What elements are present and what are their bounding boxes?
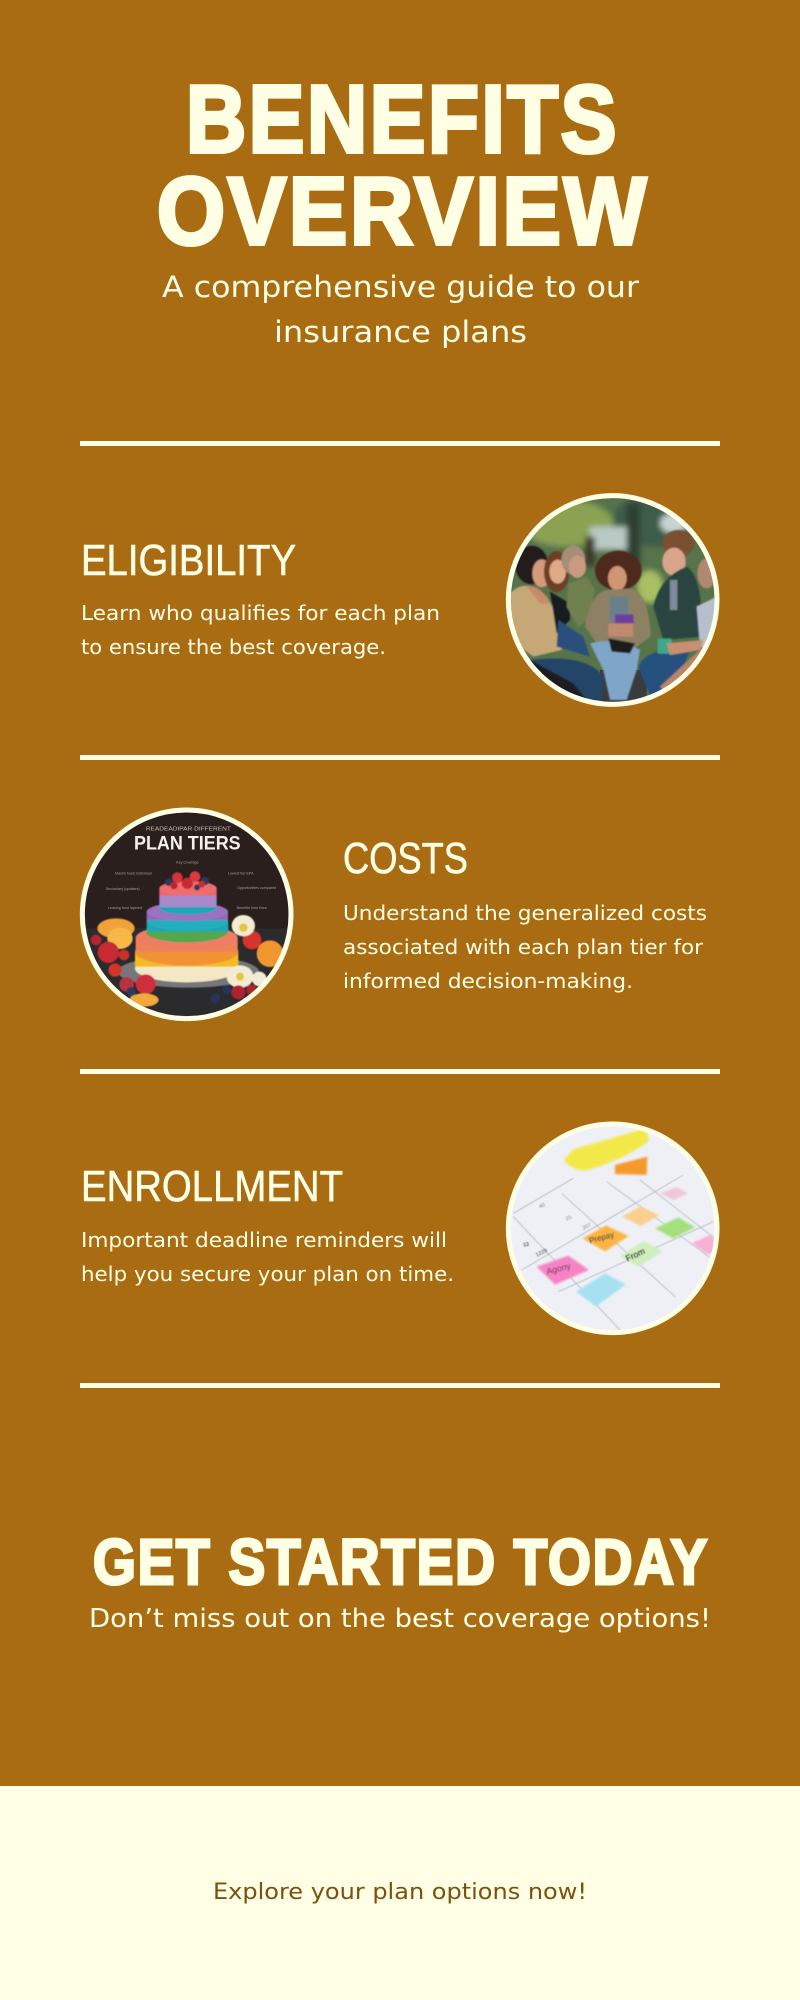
photo: calendar with sticky notes [507,1122,720,1335]
cake image caption: Key coverage [176,861,199,865]
footer band [0,1786,800,2000]
call to action [89,1526,711,1634]
cake image caption: READEADIPAR DIFFERENT [146,826,231,832]
footer text: Explore your plan options now! [213,1880,587,1905]
cake image caption: Lowest tier EPA [228,872,254,876]
header: title and subtitle [157,66,649,349]
panel: eligibility [81,493,720,707]
far right woman [697,558,716,588]
center woman [595,551,642,591]
fruit [97,918,135,938]
photo: group of people in a park [507,493,720,707]
left woman [510,586,562,657]
cake image caption: Leasing food layered [108,906,142,910]
cake image caption: Opportunities compared [237,886,276,890]
older man [561,545,585,575]
text: eligibility description: to ensure the best coverage. [81,635,386,659]
photo: rainbow plan tiers cake [80,808,293,1022]
subtitle: A comprehensive guide to our [162,270,639,304]
calendar handwriting: 1229 [535,1248,548,1258]
top tier [158,906,218,915]
berries on top [172,872,183,883]
heading: costs: COSTS [343,834,468,883]
text: costs description [343,901,707,993]
calendar handwriting: From [624,1246,646,1263]
heading: get started today: GET STARTED TODAY [93,1526,709,1598]
panel: enrollment [81,1122,720,1335]
calendar handwriting: Agony [545,1260,572,1277]
calendar handwriting: 40 [538,1202,546,1210]
text: eligibility description [81,601,440,659]
middle tier [146,930,228,943]
calendar handwriting: Prepay [588,1230,615,1245]
text: costs description: associated with each plan tier for [343,935,704,959]
title: BENEFITS [186,66,619,173]
title [157,66,649,265]
text: costs description: informed decision-making. [343,969,633,993]
calendar handwriting: 13 [523,1242,530,1249]
subtitle: insurance plans [274,315,527,349]
panel: costs [80,808,707,1022]
text: call to action tagline: Don’t miss out on the best coverage options! [89,1604,711,1634]
text: enrollment description [81,1228,454,1286]
heading: eligibility: ELIGIBILITY [81,536,296,585]
text: enrollment description: Important deadline reminders will [81,1228,447,1252]
cake image caption: Secondary (updates) [106,887,140,891]
right woman [662,530,694,557]
title: OVERVIEW [157,158,649,265]
text: costs description: Understand the generalized costs [343,901,707,925]
bottom tier [134,966,234,984]
subtitle [162,270,639,349]
text: enrollment description: help you secure your plan on time. [81,1262,454,1286]
calendar handwriting: 207 [582,1223,592,1232]
second woman [544,551,569,592]
cake image caption: Benefits form fixes [237,906,267,910]
text: eligibility description: Learn who qualifies for each plan [81,601,440,625]
heading: enrollment: ENROLLMENT [81,1162,343,1211]
cake image caption [106,826,276,910]
cake image caption: Maxim basic individual [115,872,152,876]
calendar handwriting [523,1202,646,1277]
calendar handwriting: 25 [565,1215,573,1222]
cake image caption: PLAN TIERS [134,834,241,855]
